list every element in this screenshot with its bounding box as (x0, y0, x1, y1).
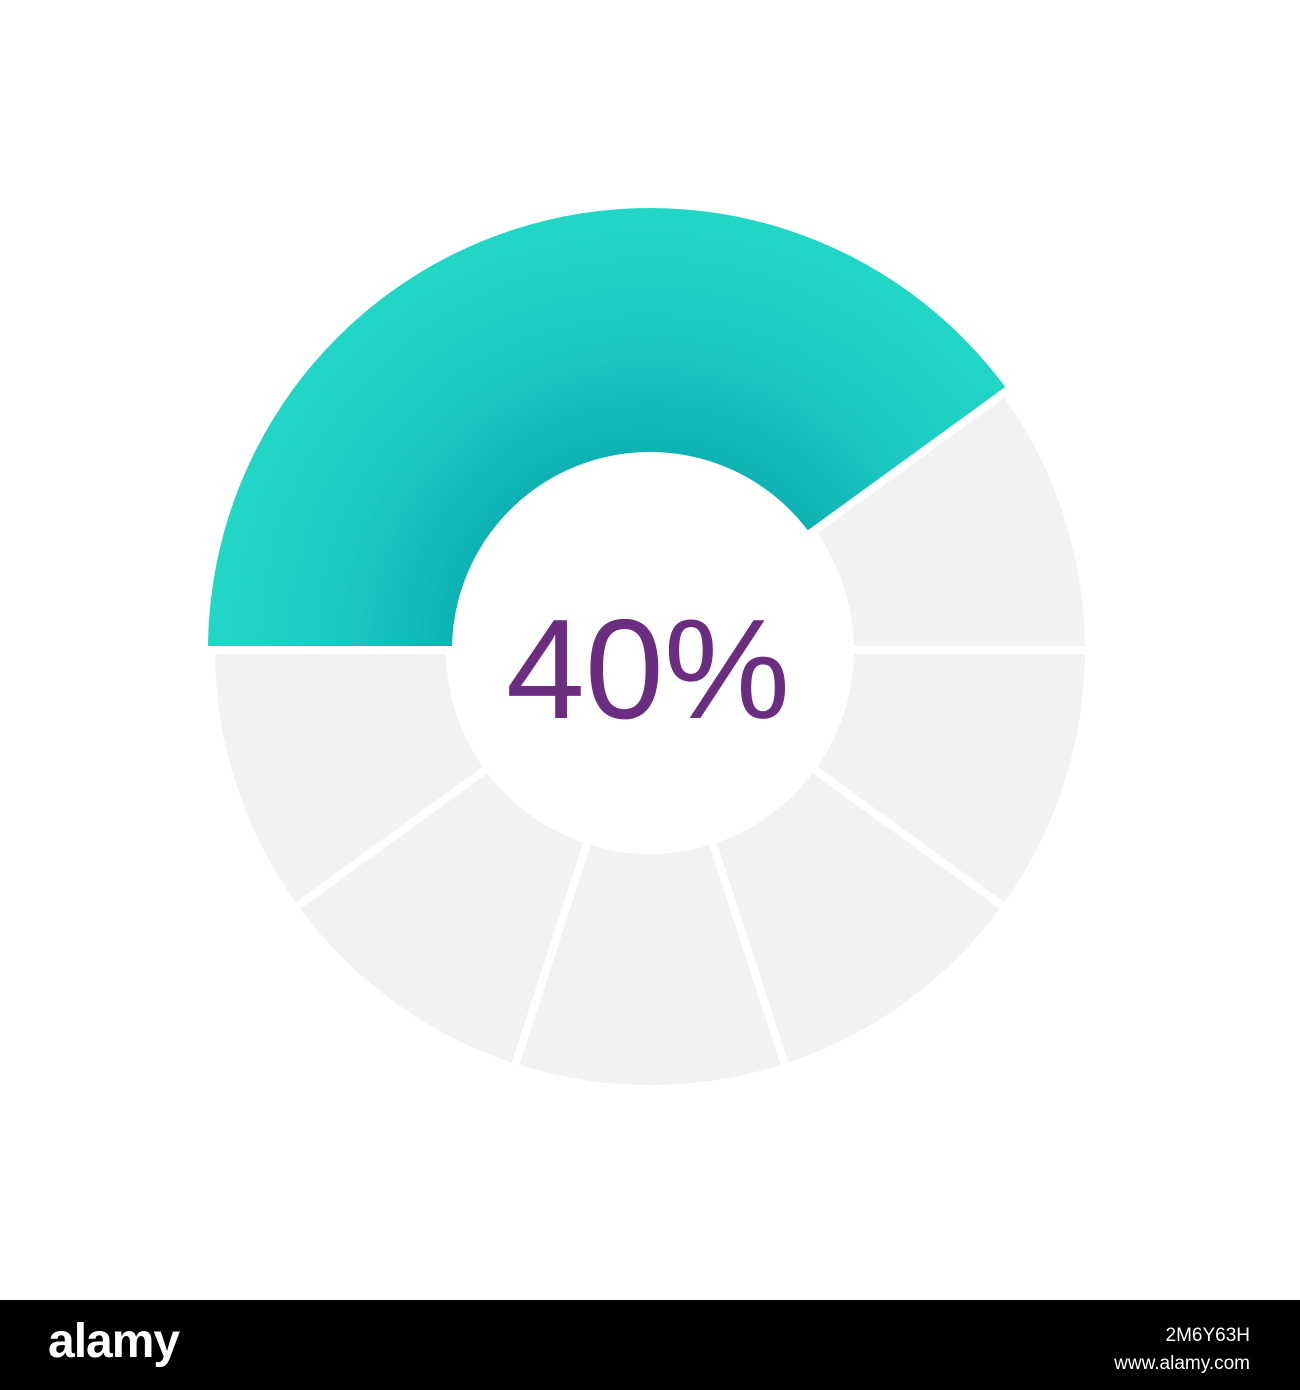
footer logo: alamy (48, 1315, 179, 1368)
footer image id: 2M6Y63H (1166, 1325, 1250, 1346)
teal segment 40% (208, 208, 1008, 650)
percentage label: 40% (506, 590, 790, 749)
footer bar (0, 1300, 1300, 1390)
footer image id (1114, 1325, 1250, 1374)
grey segments (211, 392, 1089, 1089)
footer image id: www.alamy.com (1114, 1353, 1250, 1374)
